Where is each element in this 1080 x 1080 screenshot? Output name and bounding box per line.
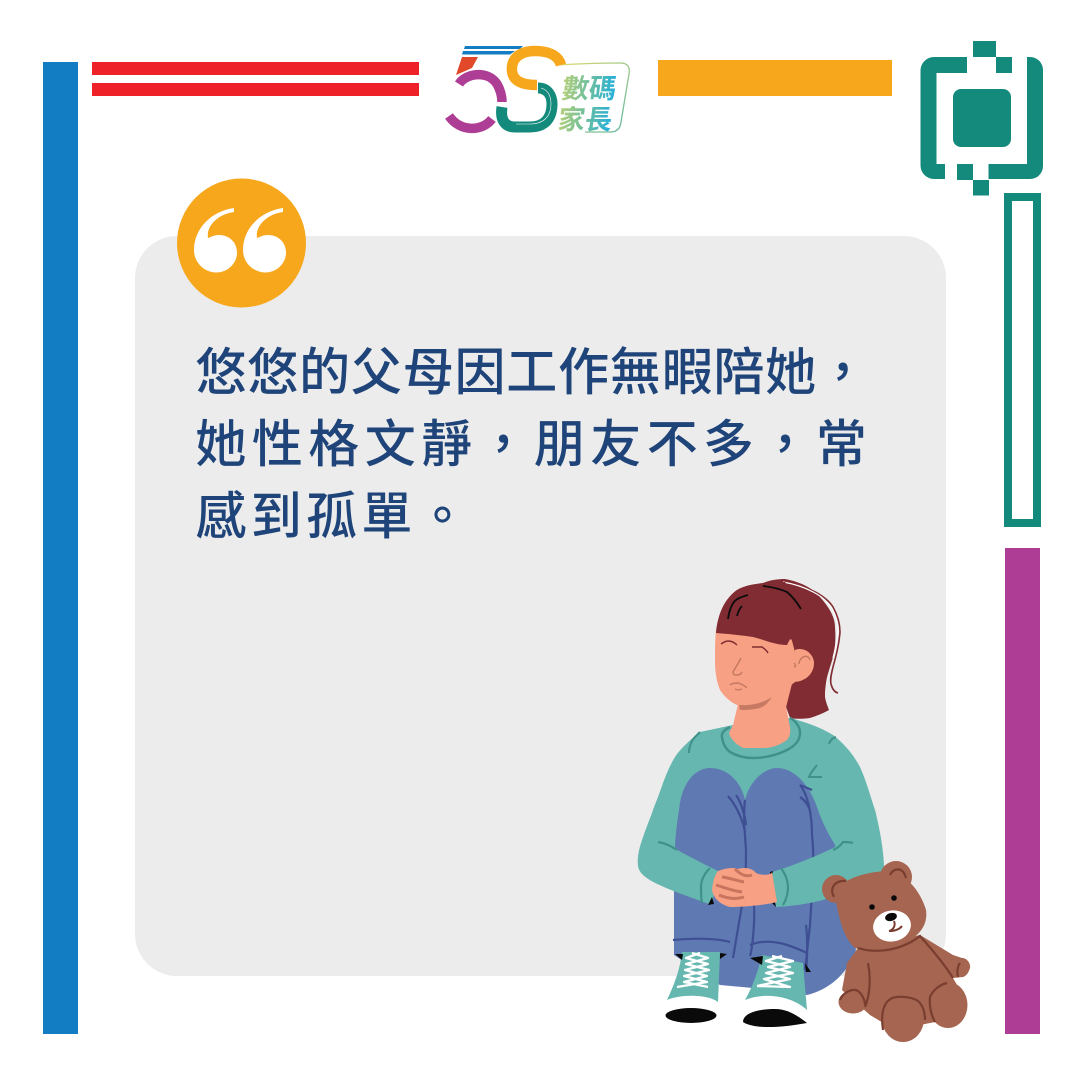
panel: grey quote card: [135, 236, 946, 976]
left blue bar: [43, 62, 78, 1034]
neck: [729, 680, 793, 748]
quote text: 她性格文靜，朋友不多，常: [196, 416, 872, 473]
sleeve creases: [689, 732, 836, 777]
quote text: [196, 344, 872, 545]
sweater arms: [638, 810, 718, 905]
jeans: [674, 768, 856, 995]
logo five red wedge: [456, 57, 478, 75]
jaw shadow: [739, 697, 772, 710]
cuff creases: [658, 842, 853, 905]
face features: [721, 641, 768, 653]
right ankle shadows: [750, 956, 811, 972]
right green outlined bar: [1008, 197, 1037, 523]
logo text: [556, 73, 618, 135]
icon: green pixel frame: [920, 41, 1043, 196]
bear feet: [838, 982, 968, 1042]
girl hair back: [716, 579, 835, 719]
logo S green: [502, 88, 552, 127]
hair strands: [783, 581, 840, 693]
left ankle shadows: [675, 953, 727, 960]
top red double bar: [92, 62, 419, 96]
logo text: 家長: [556, 104, 614, 135]
icon: orange quote badge: [177, 178, 306, 308]
logo rounded outline: [558, 63, 629, 132]
top orange bar: [658, 60, 892, 96]
shoe right: [745, 955, 807, 1010]
clasped hands: [712, 868, 777, 907]
bear arm and body: [842, 935, 970, 1030]
logo five top stripes: [462, 46, 523, 54]
bear head: [835, 871, 926, 950]
logo: 55 digital parents: [449, 46, 629, 135]
illustration: sad girl: [638, 579, 884, 1027]
bear muzzle: [871, 907, 913, 945]
logo text: 數碼: [560, 73, 618, 104]
bear ears: [822, 861, 912, 903]
bear ears inner: [832, 869, 906, 897]
hair fringe: [716, 582, 800, 652]
right purple bar: [1005, 548, 1040, 1034]
illustration: teddy bear: [822, 861, 970, 1042]
bear eyes and nose: [869, 895, 898, 922]
jeans seams: [673, 785, 813, 972]
shoe left: [667, 952, 720, 1002]
bear mouth: [889, 921, 902, 931]
quote text: 感到孤單。: [196, 488, 472, 545]
ear: [793, 649, 814, 682]
logo S white inline: [516, 88, 551, 124]
quote text: 悠悠的父母因工作無暇陪她，: [196, 344, 869, 401]
collar: [722, 718, 800, 758]
cuff shadows: [708, 871, 776, 907]
face: [715, 630, 795, 705]
hair highlights: [728, 586, 801, 619]
logo S orange: [512, 51, 561, 85]
sweater body: [638, 718, 884, 907]
bear limb lines: [840, 936, 960, 1030]
logo five purple curve: [449, 75, 502, 128]
